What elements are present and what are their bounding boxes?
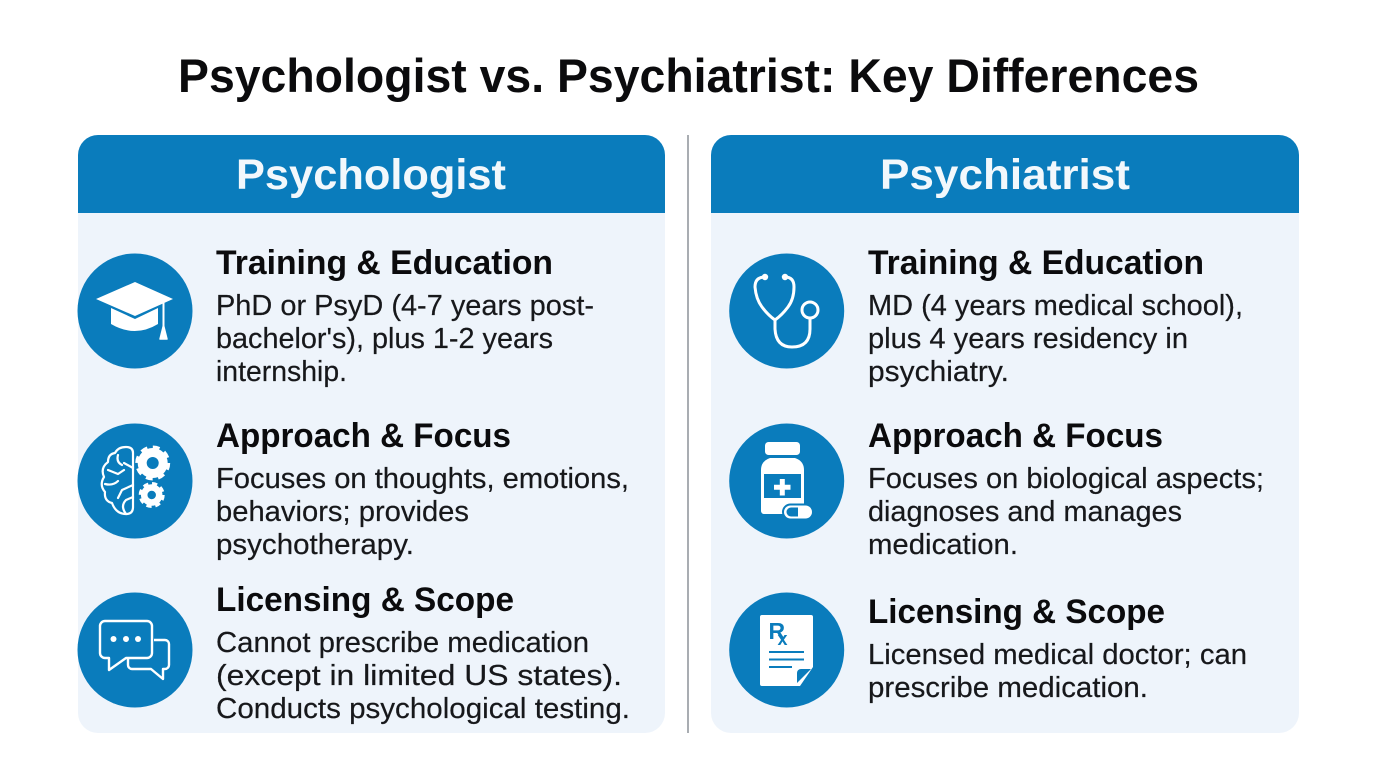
text: psychologist training: PhD or PsyD (4-7 years post- [216,290,594,322]
text: psychologist approach: Approach & Focus [216,417,511,455]
text: psychiatrist licensing: Licensing & Scope [868,593,1165,631]
icon: prescription document [729,592,844,708]
text: psychologist approach: Focuses on thoughts, emotions, [216,463,629,495]
text: psychologist licensing: Licensing & Scope [216,581,514,619]
text: psychologist training: Training & Education [216,244,553,282]
text: psychiatrist training: MD (4 years medical school), [868,290,1243,322]
text: psychiatrist licensing [868,593,1247,704]
icon: brain and gears [78,424,192,538]
text: psychologist licensing: Conducts psychological testing. [216,693,630,725]
panel: psychologist [78,135,665,733]
icon: graduation cap [78,254,192,368]
text: psychologist approach: behaviors; provides [216,496,469,528]
text: psychiatrist approach: Focuses on biological aspects; [868,463,1264,495]
icon: stethoscope [729,254,844,368]
text: psychologist training [216,244,594,388]
text: psychologist training: internship. [216,356,347,388]
text: psychiatrist approach: diagnoses and manages [868,496,1182,528]
panel header: psychologist: Psychologist [236,151,506,199]
text: psychologist licensing: Cannot prescribe medication [216,627,589,659]
text: psychologist approach [216,417,629,561]
panel header: psychiatrist [711,135,1299,213]
text: psychiatrist licensing: Licensed medical doctor; can [868,639,1247,671]
text: psychiatrist training: Training & Education [868,244,1204,282]
text: psychologist training: bachelor's), plus 1-2 years [216,323,553,355]
text: psychiatrist approach: medication. [868,529,1018,561]
text: psychologist licensing [216,581,630,725]
icon: prescription document: R [768,618,785,644]
panel header: psychologist [78,135,665,213]
text: psychologist approach: psychotherapy. [216,529,414,561]
icon: chat bubbles [78,592,192,708]
panel header: psychiatrist: Psychiatrist [880,151,1130,199]
text: psychiatrist training [868,244,1243,388]
text: psychiatrist training: plus 4 years residency in [868,323,1188,355]
text: psychologist licensing: (except in limited US states). [216,660,622,692]
panel: psychiatrist [711,135,1299,733]
text: psychiatrist approach: Approach & Focus [868,417,1163,455]
title: Psychologist vs. Psychiatrist: Key Differences [178,49,1199,102]
text: psychiatrist licensing: prescribe medication. [868,672,1148,704]
icon: medicine bottle [729,424,844,538]
text: psychiatrist approach [868,417,1264,561]
text: psychiatrist training: psychiatry. [868,356,1009,388]
icon: prescription document: x [778,629,788,649]
